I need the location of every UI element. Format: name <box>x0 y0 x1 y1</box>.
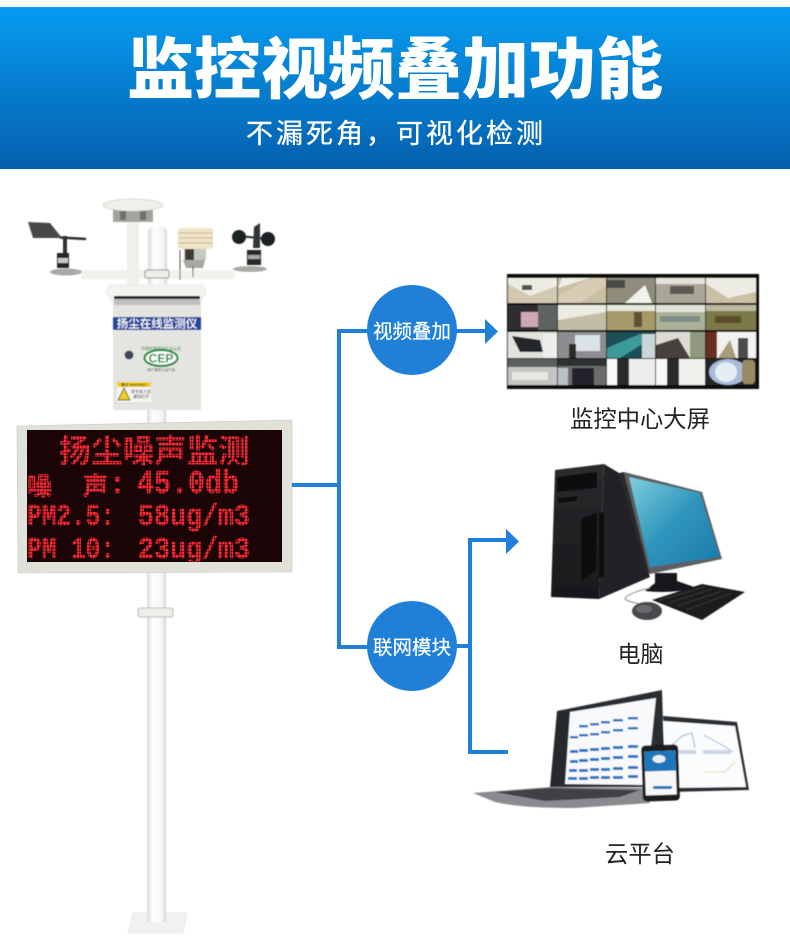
video wall caption: 监控中心大屏 <box>570 406 710 432</box>
temperature humidity shield <box>178 228 213 280</box>
CEP logo: 用户满意认证产品 <box>147 367 175 372</box>
CEP logo: 中国环境保护产品认证 <box>141 345 181 351</box>
anemometer <box>232 223 275 272</box>
LED noise reading: 噪 <box>27 473 52 501</box>
node: network module: 联网模块 <box>373 637 451 659</box>
node: network module <box>367 601 457 691</box>
row 1 feeds <box>508 278 756 303</box>
cross arm <box>82 270 235 279</box>
CEP logo <box>141 345 181 372</box>
row 3 feeds <box>508 332 756 358</box>
display frame <box>17 420 292 573</box>
connector lines <box>292 331 508 752</box>
LED panel <box>27 430 282 568</box>
title: 监控视频叠加功能 <box>127 33 663 108</box>
laptop dashboard tiles <box>568 717 638 780</box>
LED noise reading: : <box>108 468 127 503</box>
LED heading: 扬尘噪声监测 <box>59 433 250 469</box>
mouse <box>625 588 662 620</box>
mast clamp <box>145 270 169 278</box>
warning sticker <box>116 381 152 403</box>
monitor <box>619 472 722 574</box>
warning sticker: 请勿打开 <box>133 393 149 399</box>
wind vane <box>28 222 86 276</box>
LED PM10 reading: 23ug/m3 <box>138 533 250 568</box>
video wall <box>507 274 759 389</box>
node: video overlay: 视频叠加 <box>373 321 451 343</box>
node: video overlay <box>367 285 457 375</box>
LED noise reading: 声 <box>83 473 108 501</box>
white antenna cylinder <box>148 226 167 284</box>
LED PM2.5 reading: PM2.5: <box>27 500 115 535</box>
indicator button <box>124 350 134 360</box>
arrow to video wall <box>485 319 498 344</box>
LED noise reading: 45.0db <box>137 466 239 503</box>
cabinet label band: 扬尘在线监测仪 <box>117 316 198 330</box>
monitoring station pole <box>28 199 275 933</box>
subtitle: 不漏死角，可视化检测 <box>246 119 546 149</box>
LED noise reading <box>28 468 238 498</box>
phone <box>641 744 680 802</box>
main pole <box>147 408 166 922</box>
LED PM10 reading: PM 10: <box>27 533 115 568</box>
LED PM2.5 reading: 58ug/m3 <box>138 500 250 535</box>
row 2 feeds <box>508 305 756 330</box>
cloud platform devices <box>473 690 749 808</box>
arrow to computer <box>506 529 519 554</box>
header banner <box>0 7 790 169</box>
equipment cabinet <box>106 285 206 410</box>
LED display board <box>17 420 292 573</box>
top sensor mast <box>127 220 139 286</box>
pole base plate <box>128 913 187 933</box>
pole collar <box>138 608 173 617</box>
desktop computer <box>551 464 745 620</box>
LED PM2.5 reading <box>28 502 249 532</box>
warning sticker: 非专业人员 <box>131 388 151 394</box>
keyboard <box>652 584 745 620</box>
laptop <box>473 690 665 808</box>
tablet <box>663 716 749 792</box>
computer caption: 电脑 <box>618 641 664 667</box>
monitor stand <box>645 573 697 592</box>
LED PM10 reading <box>28 536 249 562</box>
CEP logo: CEP <box>149 352 173 366</box>
tower <box>551 464 650 599</box>
row 4 feeds <box>508 359 756 385</box>
cloud platform caption: 云平台 <box>605 841 675 867</box>
top rain cap sensor <box>103 199 163 222</box>
warning sticker: 警告 WARNING <box>121 382 147 387</box>
